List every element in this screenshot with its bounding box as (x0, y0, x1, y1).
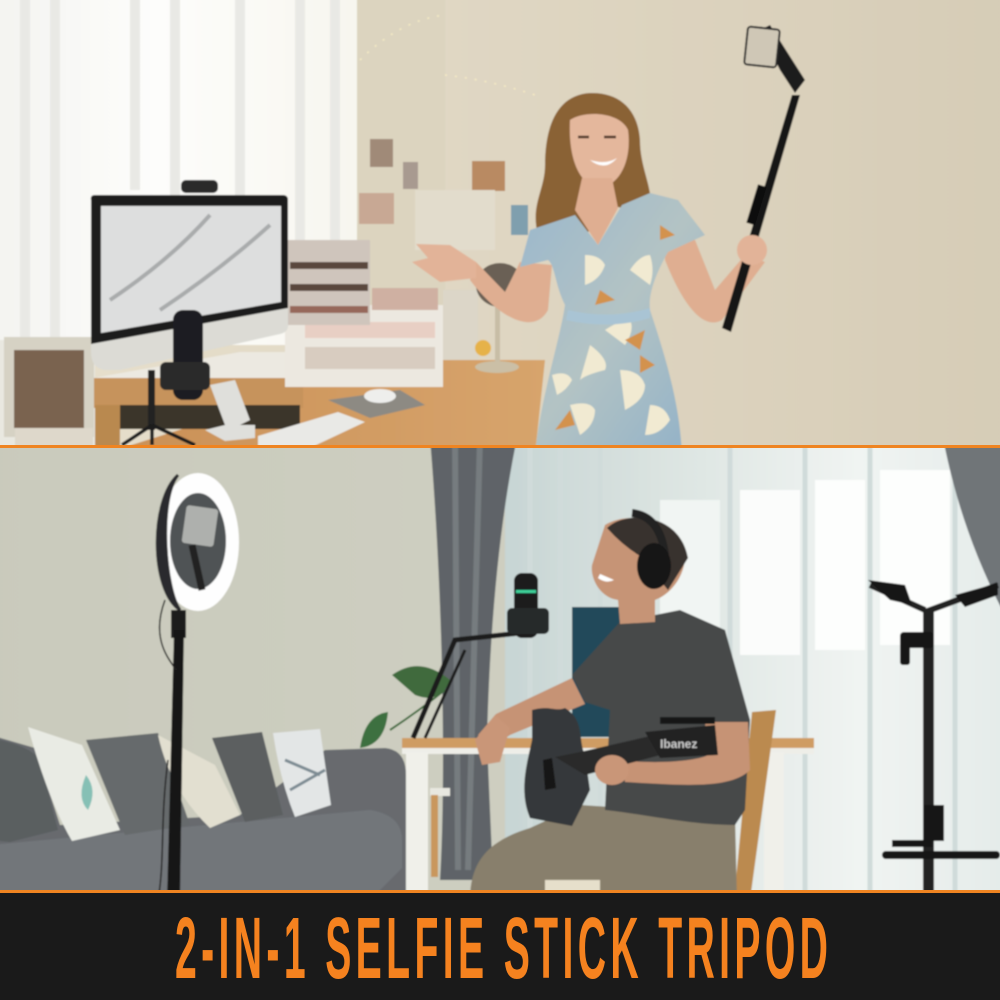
phone stand (205, 380, 255, 441)
chair (734, 710, 776, 900)
grey curtains (430, 438, 1000, 880)
woman (412, 93, 765, 455)
desktop shelf (93, 352, 303, 455)
photo: ring light and guitarist (0, 438, 1000, 900)
head (592, 518, 685, 624)
hair (536, 93, 651, 248)
t-shirt (572, 610, 750, 825)
selfie stick and phone (722, 25, 805, 332)
monitor (91, 180, 288, 370)
title: 2-IN-1 SELFIE STICK TRIPOD (175, 901, 828, 997)
cushions (0, 727, 331, 842)
divider: bottom orange rule (0, 890, 1000, 893)
banner background (0, 893, 1000, 1000)
ring light (157, 473, 239, 611)
face (570, 114, 629, 188)
ring light stand (158, 600, 186, 900)
arms (478, 678, 585, 745)
dress flowers (552, 255, 670, 435)
fretting hand (595, 755, 629, 785)
guitar stand tripod (868, 580, 998, 900)
right arm (665, 240, 765, 322)
left arm (470, 262, 552, 322)
round mirror and lamp (475, 263, 524, 373)
desktop microphone on tripod (122, 310, 210, 445)
electric guitar: Ibanez (660, 737, 697, 751)
smile (598, 574, 614, 582)
plant (360, 666, 450, 748)
guitarist (470, 513, 750, 900)
jewellery case (4, 337, 94, 455)
monitor behind (571, 606, 621, 738)
desk (402, 738, 814, 900)
desk (129, 359, 546, 445)
sheer curtains and window (505, 438, 1000, 900)
photo: woman filming with selfie stick (0, 0, 1000, 455)
dress (520, 193, 705, 455)
keyboard and mouse mat (256, 388, 425, 445)
sofa (0, 735, 406, 900)
neck and chest (575, 178, 618, 245)
electric guitar (524, 708, 718, 826)
divider: top orange rule (0, 445, 1000, 448)
wall photos (359, 139, 528, 235)
white curtains (0, 0, 357, 455)
fairy lights (360, 15, 535, 95)
trousers (470, 805, 737, 900)
headphones (632, 513, 665, 555)
boom arm and microphone (413, 573, 549, 738)
storage shelves (285, 190, 495, 387)
